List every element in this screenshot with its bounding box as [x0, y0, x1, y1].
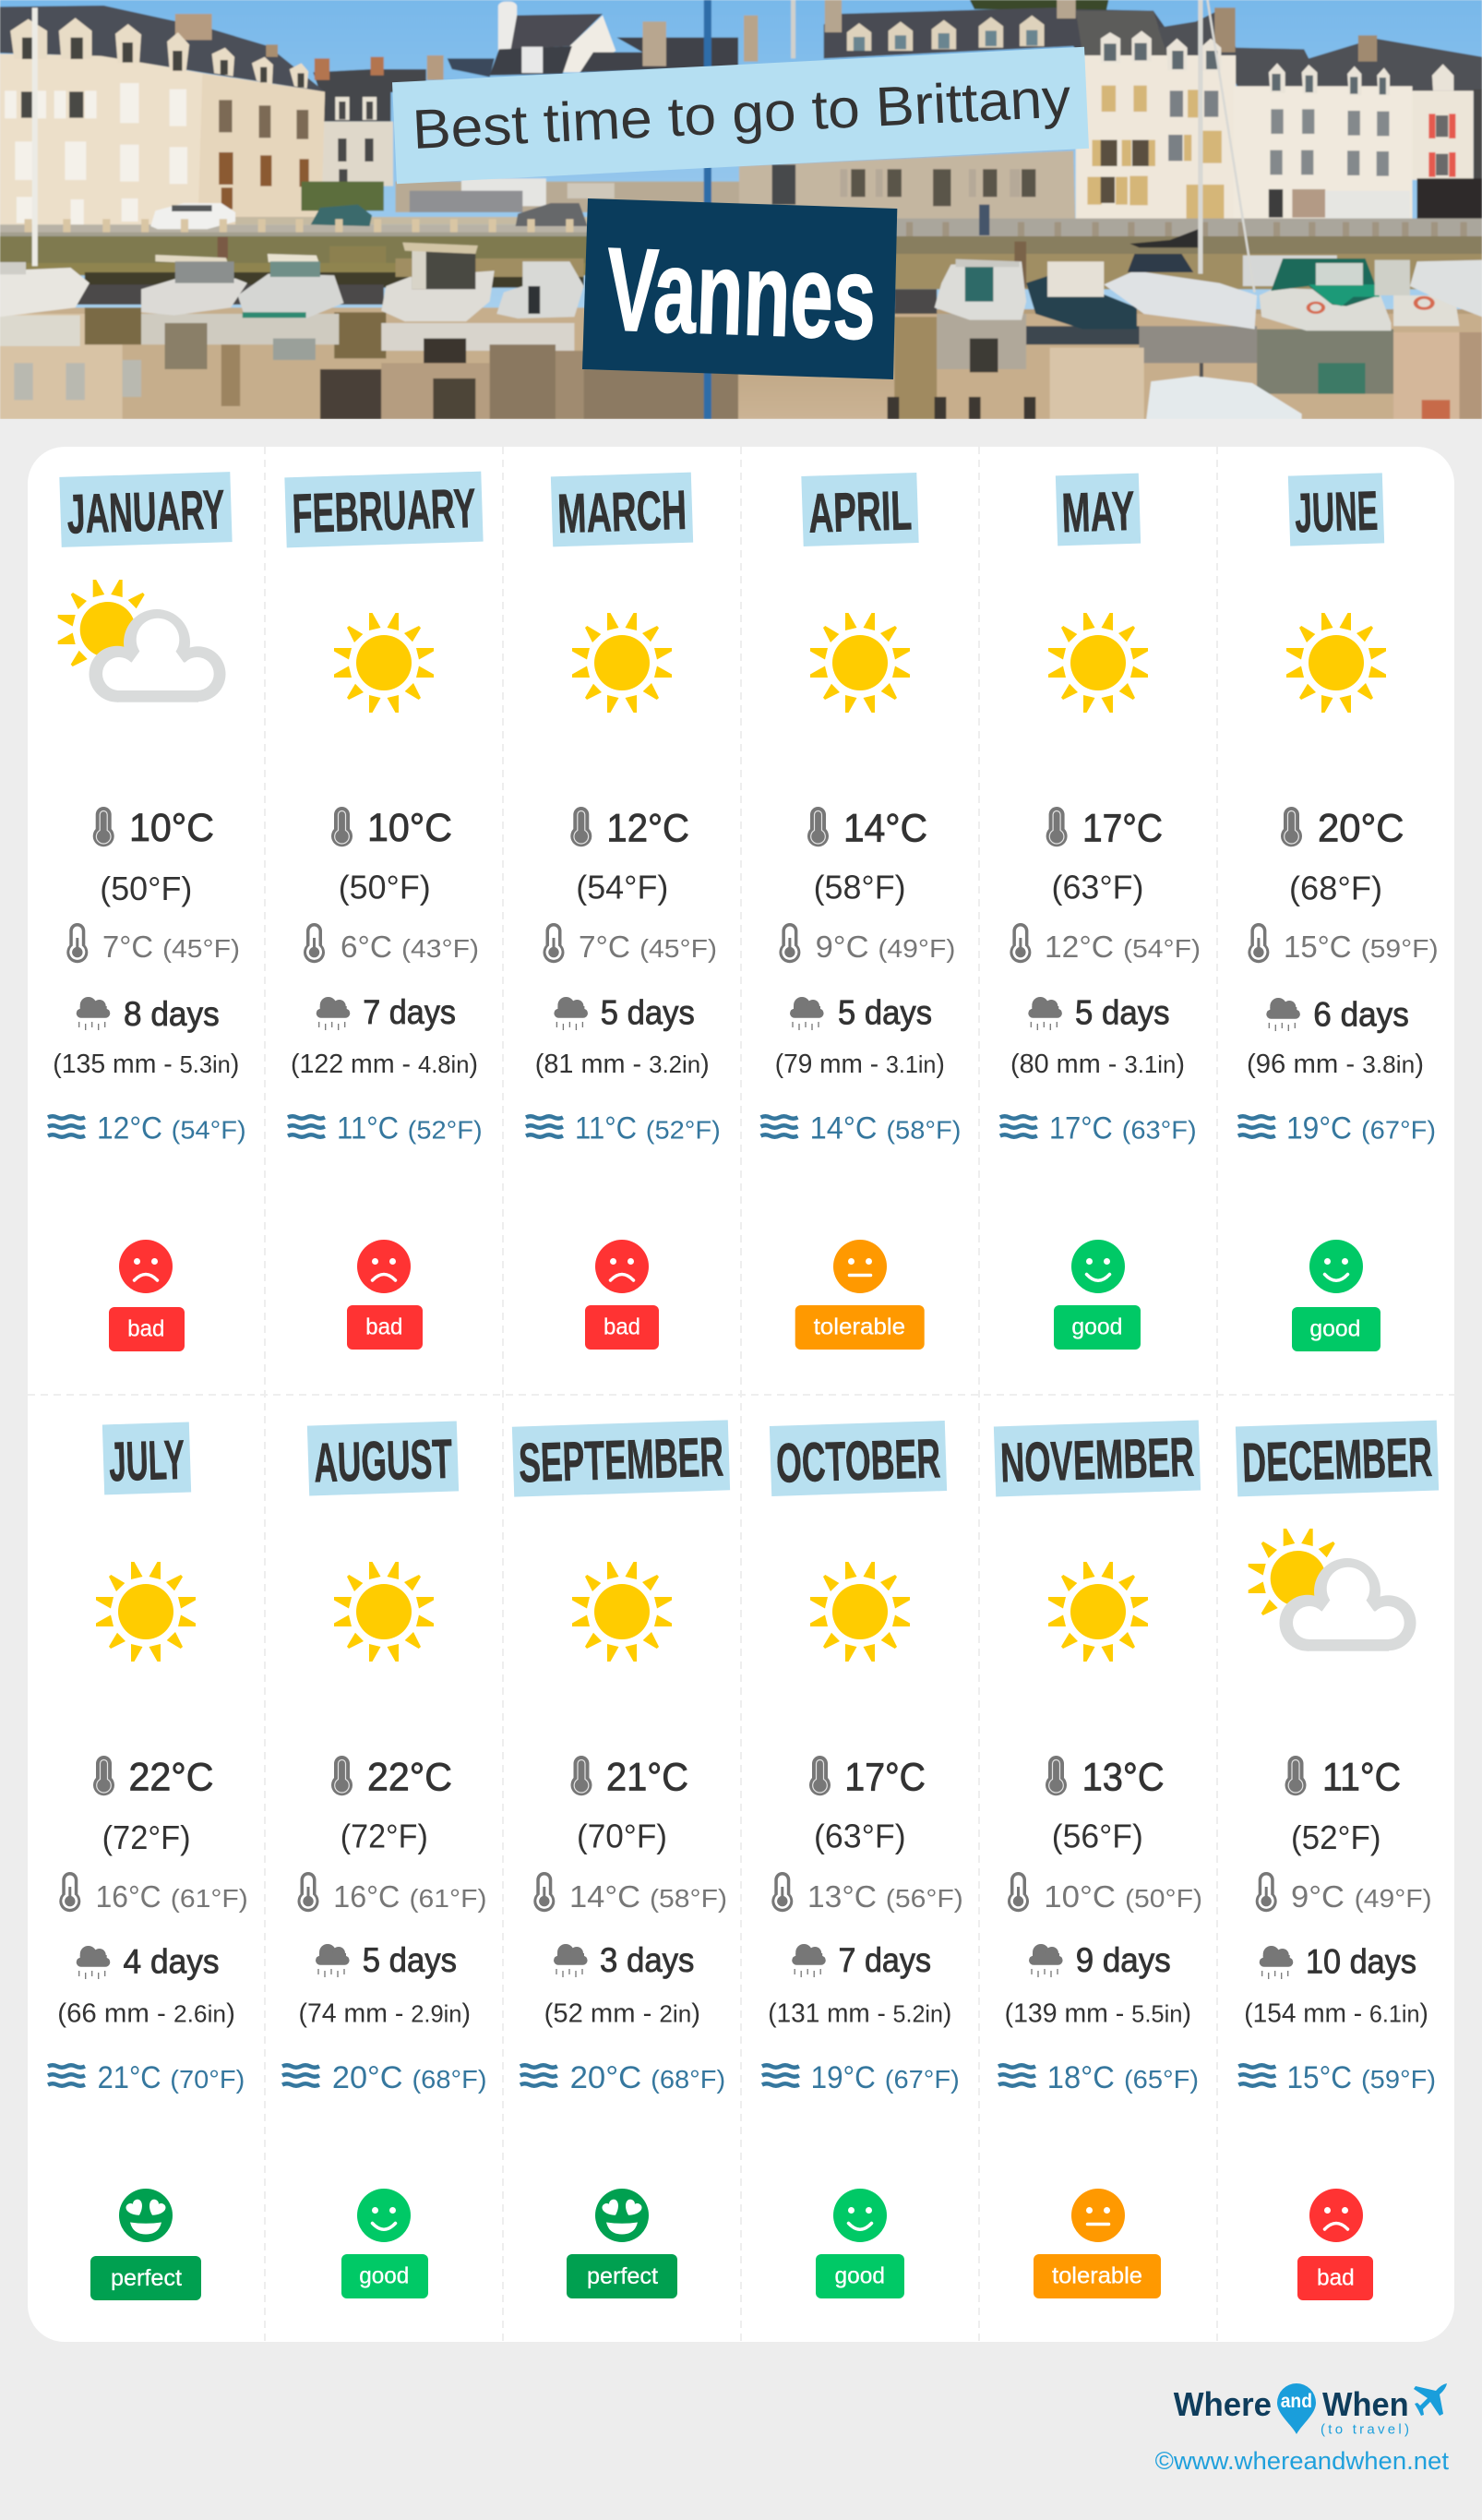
average high in Fahrenheit: (63°F) [814, 1817, 906, 1854]
rainfall amount: (81 mm - 3.2in) [535, 1050, 710, 1079]
sea temperature: (70°F) [170, 2065, 245, 2094]
icon: sun [334, 1562, 434, 1662]
heading: March [551, 473, 693, 546]
sea temperature [526, 1111, 721, 1146]
average low temperature: 12°C [1045, 930, 1114, 964]
logo: Where and When (to travel): Where [1174, 2385, 1272, 2423]
average high in Fahrenheit: (58°F) [814, 868, 906, 906]
average low temperature [1008, 1872, 1202, 1914]
average high in Fahrenheit: (54°F) [576, 868, 668, 906]
month: December [1236, 1421, 1439, 2300]
average high in Fahrenheit: (72°F) [341, 1817, 428, 1854]
icon: sun [1048, 613, 1148, 713]
rating: perfect [567, 2189, 677, 2298]
sea temperature [1238, 2060, 1436, 2095]
month: February [284, 472, 484, 1350]
average high temperature [807, 807, 927, 851]
rainy days: 5 days [363, 1941, 457, 1979]
rainy days: 4 days [124, 1942, 220, 1980]
logo: Where and When (to travel) [1174, 2383, 1447, 2438]
average low temperature: 7°C [579, 930, 630, 964]
heading: April [801, 473, 919, 546]
average low temperature: 9°C [816, 930, 869, 964]
rainy days: 5 days [601, 993, 695, 1031]
heading: May [1056, 474, 1141, 546]
average low temperature [1010, 923, 1201, 964]
average low temperature: 16°C [96, 1879, 161, 1914]
rainy days [317, 993, 456, 1031]
average low temperature [771, 1872, 963, 1914]
month: June [1238, 473, 1439, 1351]
average low temperature [297, 1872, 487, 1914]
rainy days: 7 days [363, 993, 456, 1031]
average low temperature [1248, 923, 1439, 964]
sea temperature [282, 2060, 487, 2095]
icon: sun [810, 613, 910, 713]
rainfall amount: (154 mm - 6.1in) [1244, 1998, 1428, 2028]
average low temperature: 16°C [333, 1879, 400, 1914]
logo: Where and When (to travel): (to travel) [1321, 2422, 1409, 2438]
rating: good [341, 2189, 428, 2298]
rating: good: good [834, 2263, 885, 2289]
month: January [48, 472, 246, 1351]
average high in Fahrenheit: (50°F) [100, 870, 192, 907]
heading: March: MARCH [556, 479, 687, 545]
icon: sun [572, 613, 672, 713]
heading: January: JANUARY [66, 478, 226, 546]
average low temperature [304, 923, 479, 964]
average low temperature [66, 923, 240, 964]
rainfall amount: (74 mm - 2.9in) [299, 1998, 471, 2028]
heading: October: OCTOBER [775, 1427, 941, 1494]
rainy days [1028, 993, 1170, 1031]
heading: April: APRIL [807, 479, 913, 545]
rating: bad [109, 1240, 185, 1351]
heading: September: SEPTEMBER [518, 1426, 724, 1494]
rating: perfect [90, 2189, 201, 2300]
month: May [1000, 474, 1201, 1350]
sea temperature [1238, 1111, 1436, 1146]
average high temperature: 17°C [844, 1756, 926, 1800]
average high temperature: 14°C [843, 807, 927, 851]
average high in Fahrenheit: (70°F) [577, 1817, 667, 1854]
heading: November [994, 1421, 1201, 1496]
average high temperature [331, 806, 452, 850]
month: March [526, 473, 721, 1350]
rainy days: 10 days [1306, 1942, 1416, 1980]
rating: bad: bad [604, 1314, 640, 1340]
logo: Where and When (to travel): When [1322, 2385, 1409, 2423]
rainy days [554, 993, 695, 1031]
average high temperature [809, 1756, 926, 1800]
rainy days: 8 days [124, 995, 220, 1033]
heading: August: AUGUST [313, 1428, 453, 1494]
average low temperature: (45°F) [639, 934, 717, 963]
sea temperature: 11°C [337, 1111, 399, 1146]
average low temperature: 15°C [1284, 930, 1352, 964]
sea temperature: (52°F) [408, 1115, 483, 1145]
average high temperature [1046, 807, 1163, 851]
sea temperature: 15°C [1286, 2060, 1352, 2095]
sea temperature: (67°F) [1361, 1115, 1436, 1145]
rating: tolerable [795, 1240, 925, 1350]
average low temperature [543, 923, 717, 964]
sea temperature: 19°C [1286, 1111, 1352, 1146]
city ribbon: Vannes [582, 198, 897, 379]
average low temperature: 7°C [102, 930, 153, 964]
average low temperature [779, 923, 955, 964]
average low temperature: 9°C [1291, 1879, 1345, 1914]
sea temperature [760, 1111, 961, 1146]
rainfall amount: (131 mm - 5.2in) [768, 1998, 951, 2028]
rainy days: 5 days [1075, 993, 1170, 1031]
average high in Fahrenheit: (72°F) [102, 1818, 191, 1856]
rating: bad [1297, 2189, 1373, 2300]
average high temperature: 11°C [1322, 1756, 1401, 1800]
sea temperature [998, 2060, 1199, 2095]
sea temperature: 19°C [811, 2060, 876, 2095]
rating: perfect: perfect [111, 2265, 182, 2291]
sea temperature: (58°F) [886, 1115, 961, 1145]
rating: bad: bad [1317, 2265, 1355, 2291]
sea temperature: 18°C [1047, 2060, 1115, 2095]
heading: November: NOVEMBER [999, 1426, 1195, 1494]
title ribbon: Best time to go to Brittany: Best time to go to Brittany [411, 66, 1072, 161]
average high in Fahrenheit: (50°F) [339, 868, 431, 906]
average low temperature: (50°F) [1125, 1884, 1202, 1913]
heading: February [284, 472, 484, 547]
rainy days [1266, 995, 1409, 1033]
heading: June: JUNE [1294, 480, 1379, 544]
average low temperature: 6°C [341, 930, 392, 964]
average high temperature: 21°C [606, 1756, 688, 1800]
heading: September [512, 1420, 730, 1497]
rainy days: 3 days [600, 1941, 694, 1979]
heading: February: FEBRUARY [292, 477, 477, 545]
average high temperature [331, 1756, 452, 1800]
sea temperature: (54°F) [172, 1115, 246, 1145]
banner photo: Vannes harbour [0, 0, 1482, 419]
rating: tolerable: tolerable [814, 1314, 905, 1340]
sea temperature: 20°C [570, 2060, 641, 2095]
icon: sun [1048, 1562, 1148, 1662]
rating: good [1054, 1240, 1141, 1350]
rainy days: 6 days [1313, 995, 1409, 1033]
rainy days [77, 1942, 220, 1980]
average high temperature: 22°C [367, 1756, 452, 1800]
sea temperature [288, 1111, 483, 1146]
average high in Fahrenheit: (52°F) [1291, 1818, 1380, 1856]
rainy days [792, 1941, 931, 1979]
city ribbon: Vannes: Vannes [604, 223, 878, 365]
month: September [512, 1420, 730, 2298]
icon: airplane [1414, 2383, 1447, 2416]
rating: perfect: perfect [587, 2263, 658, 2289]
sea temperature [48, 1111, 246, 1146]
rainfall amount: (96 mm - 3.8in) [1247, 1050, 1424, 1079]
average low temperature: (58°F) [650, 1884, 727, 1913]
rainfall amount: (66 mm - 2.6in) [57, 1998, 235, 2028]
rating: bad [585, 1240, 659, 1350]
average low temperature: 13°C [807, 1879, 877, 1914]
heading: July [102, 1422, 191, 1494]
sea temperature: (63°F) [1122, 1115, 1197, 1145]
sea temperature: 20°C [332, 2060, 402, 2095]
average high temperature: 13°C [1082, 1756, 1165, 1800]
sea temperature: 17°C [1049, 1111, 1113, 1146]
average high temperature [570, 1756, 688, 1800]
heading: July: JULY [108, 1429, 185, 1493]
heading: October [770, 1421, 947, 1496]
rainfall amount: (135 mm - 5.3in) [53, 1050, 239, 1079]
rating: good [816, 2189, 904, 2298]
average low temperature [533, 1872, 727, 1914]
rainfall amount: (122 mm - 4.8in) [291, 1050, 478, 1079]
average high temperature: 10°C [367, 806, 452, 850]
average high in Fahrenheit: (68°F) [1289, 870, 1382, 907]
icon: sun [572, 1562, 672, 1662]
average low temperature: (59°F) [1361, 934, 1439, 963]
average low temperature: 14°C [569, 1879, 640, 1914]
average high temperature [570, 807, 689, 851]
sea temperature: (67°F) [885, 2065, 960, 2094]
month: November [994, 1421, 1202, 2298]
average low temperature: (49°F) [878, 934, 955, 963]
rating: bad: bad [365, 1314, 402, 1340]
rainy days [554, 1941, 694, 1979]
rating: bad: bad [127, 1316, 164, 1342]
rainy days [1029, 1941, 1171, 1979]
rainy days [77, 995, 220, 1033]
average high temperature: 17°C [1082, 807, 1163, 851]
icon: sun behind cloud [1249, 1529, 1416, 1651]
rainfall amount: (52 mm - 2in) [544, 1998, 700, 2028]
sea temperature [762, 2060, 960, 2095]
heading: June [1288, 473, 1384, 546]
rainy days: 7 days [838, 1941, 931, 1979]
average high temperature: 10°C [129, 806, 214, 850]
average low temperature: (54°F) [1123, 934, 1201, 963]
sea temperature: 14°C [810, 1111, 877, 1146]
sea temperature: (68°F) [412, 2065, 487, 2094]
average low temperature: (61°F) [410, 1884, 487, 1913]
rainfall amount: (139 mm - 5.5in) [1005, 1998, 1191, 2028]
rainfall amount: (79 mm - 3.1in) [775, 1050, 945, 1079]
title ribbon: Best time to go to Brittany [392, 47, 1089, 184]
rating: good: good [1071, 1314, 1122, 1340]
rainy days [316, 1941, 457, 1979]
average low temperature [1256, 1872, 1432, 1914]
copyright website: ©www.whereandwhen.net [1155, 2447, 1449, 2475]
rating: bad [347, 1240, 423, 1350]
average high temperature [93, 1756, 214, 1800]
sea temperature: (65°F) [1124, 2065, 1199, 2094]
average low temperature: (56°F) [886, 1884, 963, 1913]
average low temperature: (49°F) [1355, 1884, 1432, 1913]
sea temperature: (59°F) [1361, 2065, 1436, 2094]
rainy days [1260, 1942, 1416, 1980]
heading: August [307, 1421, 459, 1496]
sea temperature: 11°C [575, 1111, 637, 1146]
panel: monthly climate calendar [28, 447, 1454, 2342]
rating: good [1292, 1240, 1380, 1351]
average high temperature [1046, 1756, 1165, 1800]
average high temperature [93, 806, 214, 850]
rating: good: good [1309, 1316, 1360, 1342]
average low temperature: (43°F) [401, 934, 479, 963]
icon: map pin [1277, 2383, 1316, 2434]
icon: sun [334, 613, 434, 713]
rainy days [790, 993, 932, 1031]
month: April [760, 473, 961, 1350]
average high temperature: 12°C [606, 807, 689, 851]
sea temperature [520, 2060, 725, 2095]
sea temperature: (68°F) [651, 2065, 725, 2094]
average low temperature: (45°F) [162, 934, 240, 963]
average high temperature: 20°C [1318, 807, 1404, 851]
heading: January [59, 472, 233, 547]
icon: sun [96, 1562, 196, 1662]
heading: May: MAY [1061, 480, 1136, 544]
rating: tolerable: tolerable [1052, 2263, 1142, 2289]
average high temperature: 22°C [129, 1756, 214, 1800]
sea temperature: 21°C [98, 2060, 161, 2095]
average low temperature [59, 1872, 248, 1914]
rating: good: good [359, 2263, 409, 2289]
month: October [762, 1421, 963, 2298]
month: August [282, 1421, 487, 2298]
sea temperature: (52°F) [646, 1115, 721, 1145]
month: July [48, 1422, 248, 2300]
sea temperature [48, 2060, 245, 2095]
average high in Fahrenheit: (63°F) [1052, 868, 1144, 906]
average high temperature [1281, 807, 1404, 851]
average low temperature: (61°F) [171, 1884, 248, 1913]
icon: sun [1286, 613, 1386, 713]
rating: tolerable [1034, 2189, 1161, 2298]
rainy days: 5 days [838, 993, 932, 1031]
rainy days: 9 days [1076, 1941, 1171, 1979]
logo: Where and When (to travel): and [1281, 2391, 1312, 2412]
average high in Fahrenheit: (56°F) [1052, 1817, 1143, 1854]
average high temperature [1285, 1756, 1401, 1800]
sea temperature [1000, 1111, 1197, 1146]
rainfall amount: (80 mm - 3.1in) [1010, 1050, 1185, 1079]
sea temperature: 12°C [97, 1111, 162, 1146]
icon: sun behind cloud [58, 580, 225, 702]
icon: sun [810, 1562, 910, 1662]
average low temperature: 10°C [1044, 1879, 1116, 1914]
